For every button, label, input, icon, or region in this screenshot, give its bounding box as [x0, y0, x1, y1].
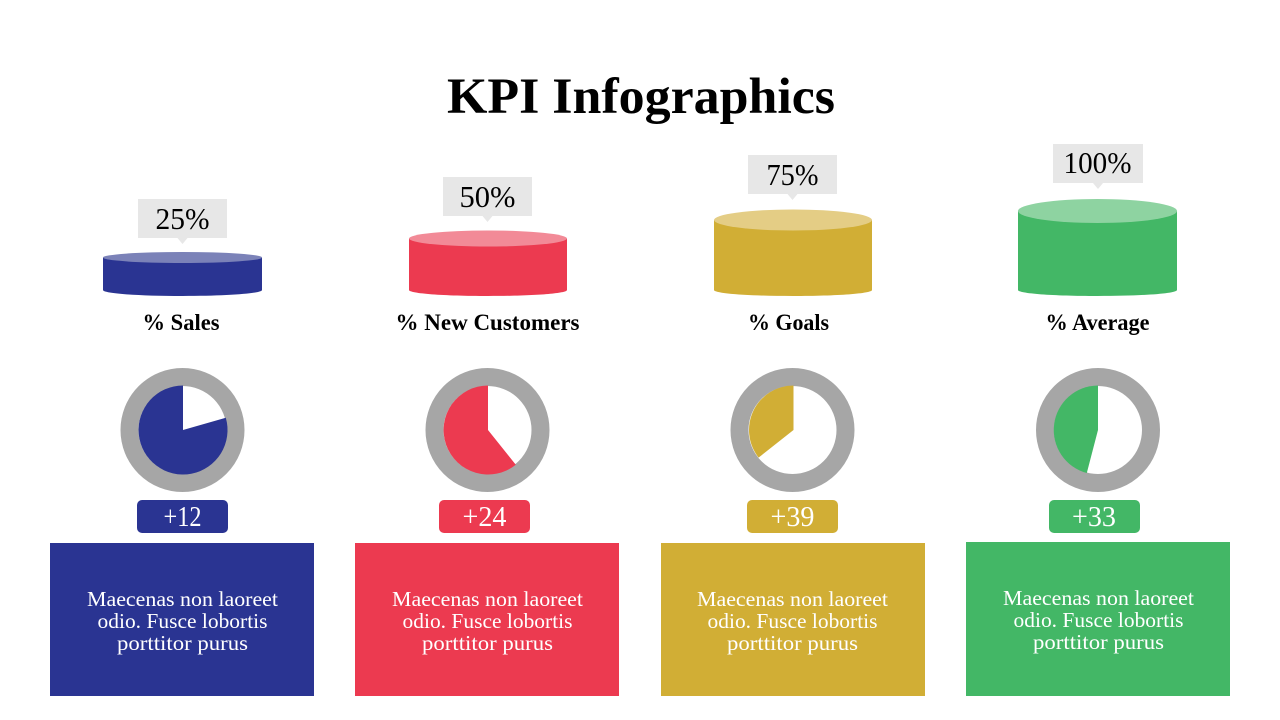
gauge: sales — [130, 377, 236, 483]
value callout: 50% — [443, 177, 532, 222]
text panel: new customers — [355, 543, 619, 696]
text panel: average: odio. Fusce lobortis — [1014, 608, 1184, 632]
text panel: new customers: porttitor purus — [422, 631, 553, 655]
column: % Average — [966, 144, 1230, 696]
text panel: sales: odio. Fusce lobortis — [98, 609, 268, 633]
value callout: 100% — [1053, 144, 1143, 189]
label: % New Customers: % New Customers — [396, 310, 580, 335]
value callout: 75% — [748, 155, 837, 200]
label: % Goals: % Goals — [748, 310, 829, 335]
text panel: new customers: Maecenas non laoreet — [392, 587, 583, 611]
cylinder: new customers — [409, 230, 567, 296]
cylinder: sales — [103, 252, 262, 296]
text panel: sales — [50, 543, 314, 696]
title: KPI Infographics — [447, 69, 835, 125]
text panel: goals — [661, 543, 925, 696]
column: % Sales — [50, 199, 314, 696]
text panel: new customers: odio. Fusce lobortis — [402, 609, 572, 633]
gauge: goals — [740, 377, 846, 483]
badge: +12 — [137, 500, 228, 533]
label: % Sales: % Sales — [142, 310, 220, 335]
badge: +24: +24 — [462, 502, 506, 533]
column: % New Customers — [355, 177, 619, 696]
badge: +24 — [439, 500, 530, 533]
value callout: 25% — [138, 199, 227, 244]
badge: +33 — [1049, 500, 1140, 533]
badge: +33: +33 — [1072, 502, 1116, 533]
value callout: 75%: 75% — [766, 157, 818, 192]
gauge: new customers — [434, 377, 540, 483]
badge: +12: +12 — [164, 502, 202, 533]
gauge: average — [1045, 377, 1151, 483]
text panel: sales: porttitor purus — [117, 631, 248, 655]
badge: +39: +39 — [770, 502, 814, 533]
text panel: sales: Maecenas non laoreet — [87, 587, 278, 611]
text panel: average: Maecenas non laoreet — [1003, 586, 1194, 610]
text panel: goals: odio. Fusce lobortis — [708, 609, 878, 633]
cylinder: average — [1018, 199, 1177, 296]
text panel: average — [966, 542, 1230, 696]
text panel: goals: porttitor purus — [727, 631, 858, 655]
value callout: 50%: 50% — [460, 179, 516, 214]
text panel: average: porttitor purus — [1033, 630, 1164, 654]
cylinder: goals — [714, 210, 872, 296]
badge: +39 — [747, 500, 838, 533]
text panel: goals: Maecenas non laoreet — [697, 587, 888, 611]
column: % Goals — [661, 155, 925, 696]
label: % Average: % Average — [1046, 310, 1150, 335]
value callout: 25%: 25% — [156, 201, 210, 236]
value callout: 100%: 100% — [1064, 145, 1132, 180]
